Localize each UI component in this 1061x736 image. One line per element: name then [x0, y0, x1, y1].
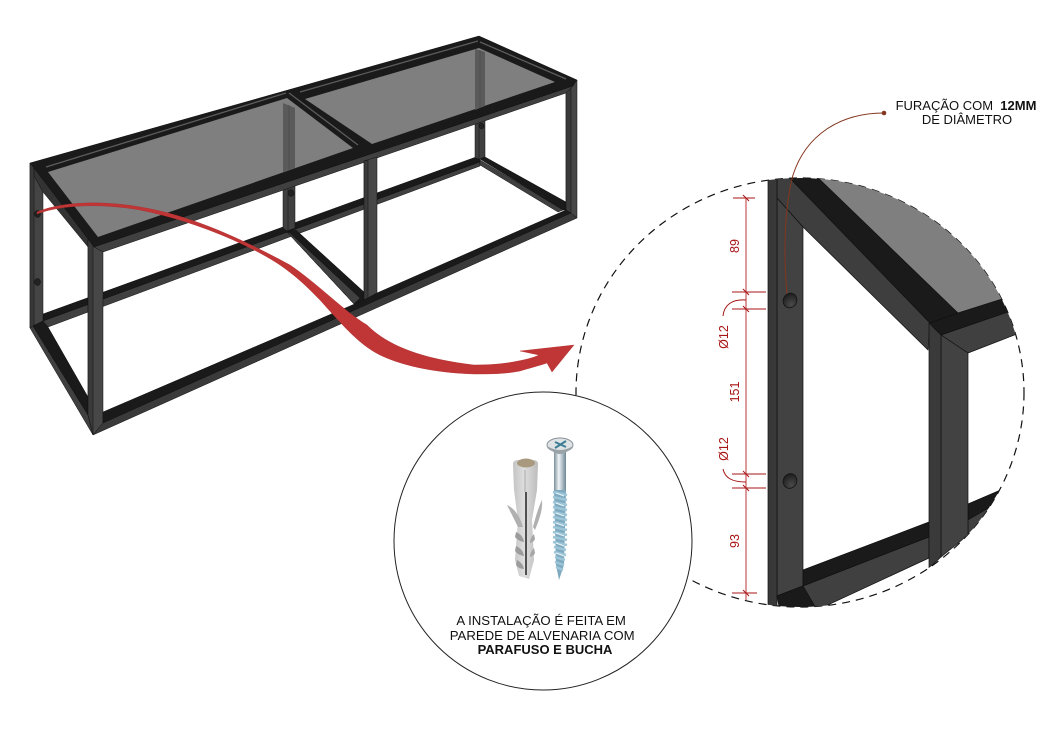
dimension line: [745, 198, 747, 600]
front bottom rail: [93, 210, 577, 435]
dimension labels: 151: [728, 382, 742, 402]
dimension labels: 93: [728, 534, 742, 548]
top front rail: [930, 298, 1007, 334]
right bottom side rail: [480, 157, 566, 212]
front top rail face: [94, 86, 573, 252]
glass inset trim: [46, 41, 566, 167]
back legs: [283, 90, 485, 231]
top frame plate: [30, 36, 577, 247]
dimension ticks: [732, 195, 766, 596]
dimension annotations: [723, 195, 766, 600]
drill holes: [782, 292, 798, 308]
detail drawing of frame corner: [768, 178, 1016, 607]
installation circle: [394, 392, 692, 690]
mounting holes: [34, 123, 484, 286]
front legs: [88, 80, 577, 435]
installation text: PAREDE DE ALVENARIA COM: [450, 628, 635, 643]
lower leader curve: [723, 469, 746, 482]
drill callout text: FURAÇÃO COM 12MM: [896, 98, 1036, 113]
back bottom rail: [43, 157, 480, 327]
detail view: dashed magnifier circle: [576, 165, 1040, 612]
icon: wall anchor: [507, 458, 542, 579]
icon: screw: [547, 438, 573, 580]
top diagonal rail: [777, 170, 930, 350]
shelf frame isometric drawing: [30, 36, 577, 435]
bottom left side rail: [30, 321, 93, 435]
leader curves: [723, 300, 746, 316]
glass panels: [48, 48, 555, 237]
red curved arrow: [37, 203, 574, 374]
dimension labels: 89: [728, 239, 742, 253]
drill callout text: DE DIÂMETRO: [922, 112, 1012, 127]
wall leg: [777, 198, 803, 596]
glass: [819, 178, 1002, 312]
drill callout leader: [785, 111, 886, 294]
dimension labels: [717, 239, 742, 548]
dimension labels: Ø12: [717, 325, 731, 349]
bottom rail: [803, 522, 929, 586]
front leg: [941, 335, 968, 557]
back left leg: [30, 163, 43, 328]
mid bottom side rail: [287, 230, 364, 304]
installation text: A INSTALAÇÃO É FEITA EM: [456, 613, 626, 628]
dimension labels: Ø12: [717, 437, 731, 461]
installation text: PARAFUSO E BUCHA: [478, 642, 613, 657]
